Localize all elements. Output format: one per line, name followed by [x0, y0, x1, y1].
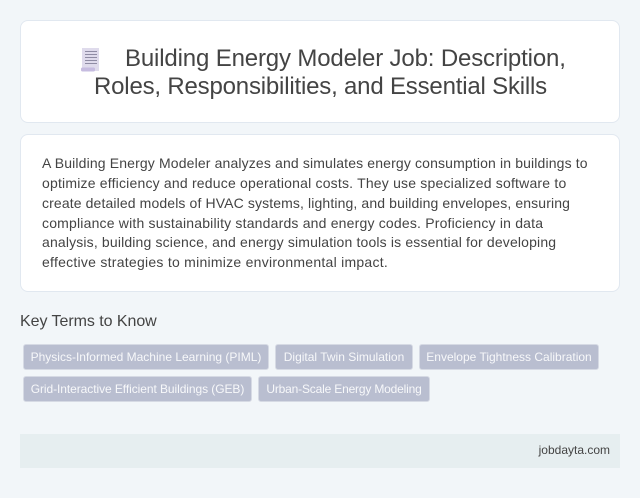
icon: document scroll	[81, 48, 99, 72]
tag	[23, 344, 269, 370]
description text: effective strategies to minimize environmental impact.	[42, 254, 388, 270]
tag	[419, 344, 599, 370]
tag: Physics-Informed Machine Learning (PIML)	[31, 350, 261, 364]
tag	[258, 376, 430, 402]
tag: Urban-Scale Energy Modeling	[266, 382, 422, 396]
tag	[275, 344, 413, 370]
title line 2: Roles, Responsibilities, and Essential Skills	[94, 73, 547, 100]
heading: key terms: Key Terms to Know	[20, 313, 157, 330]
description text	[42, 155, 588, 270]
title line 1: Building Energy Modeler Job: Description,	[125, 45, 566, 72]
footer bar	[20, 434, 620, 468]
description text: analysis, building science, and energy simulation tools is essential for developing	[42, 234, 556, 250]
tag: Digital Twin Simulation	[284, 350, 404, 364]
panel: title card	[20, 20, 620, 123]
tags	[23, 344, 599, 402]
description text: optimize efficiency and reduce operational costs. They use specialized software to	[42, 175, 566, 191]
tag	[23, 376, 252, 402]
tag: Grid-Interactive Efficient Buildings (GEB)	[31, 382, 244, 396]
tag: Envelope Tightness Calibration	[426, 350, 592, 364]
footer text: jobdayta.com	[539, 443, 610, 457]
description text: compliance with sustainability standards and energy codes. Proficiency in data	[42, 215, 543, 231]
panel: description card	[20, 134, 620, 292]
description text: A Building Energy Modeler analyzes and simulates energy consumption in buildings to	[42, 155, 588, 171]
description text: create detailed models of HVAC systems, lighting, and building envelopes, ensuring	[42, 195, 570, 211]
